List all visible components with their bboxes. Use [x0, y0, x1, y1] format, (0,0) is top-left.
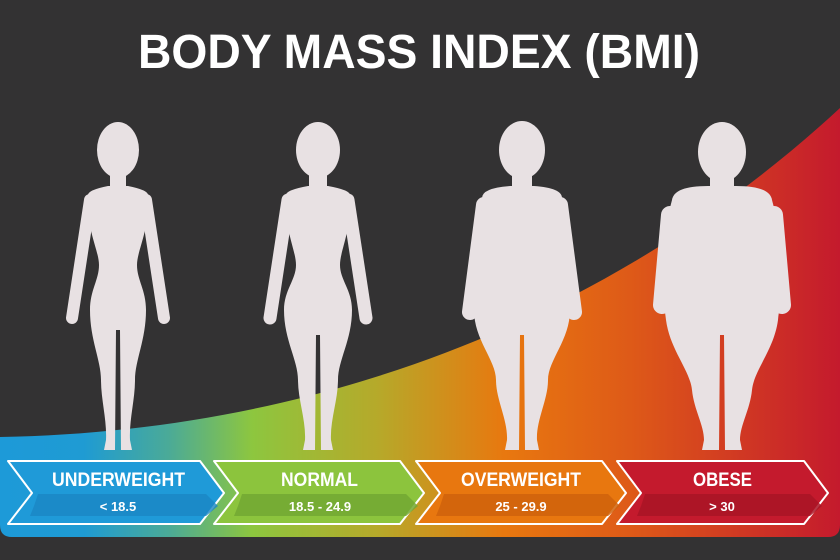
figure: underweight: [72, 122, 164, 450]
label: obese: [617, 461, 828, 524]
gradient band: [0, 108, 840, 537]
label: overweight: [416, 461, 626, 524]
label: normal: NORMAL: [281, 470, 358, 491]
label: normal: 18.5 - 24.9: [289, 499, 351, 514]
title: BODY MASS INDEX (BMI): [138, 26, 700, 79]
label: overweight: 25 - 29.9: [495, 499, 547, 514]
label: obese: OBESE: [693, 470, 752, 491]
figure: obese: [660, 122, 784, 450]
figure: normal: [270, 122, 366, 450]
label: obese: > 30: [709, 499, 735, 514]
label: underweight: UNDERWEIGHT: [52, 470, 185, 491]
label: underweight: < 18.5: [100, 499, 136, 514]
label: normal: [214, 461, 424, 524]
figure: overweight: [470, 121, 574, 450]
label: overweight: OVERWEIGHT: [461, 470, 581, 491]
label: underweight: [8, 461, 224, 524]
